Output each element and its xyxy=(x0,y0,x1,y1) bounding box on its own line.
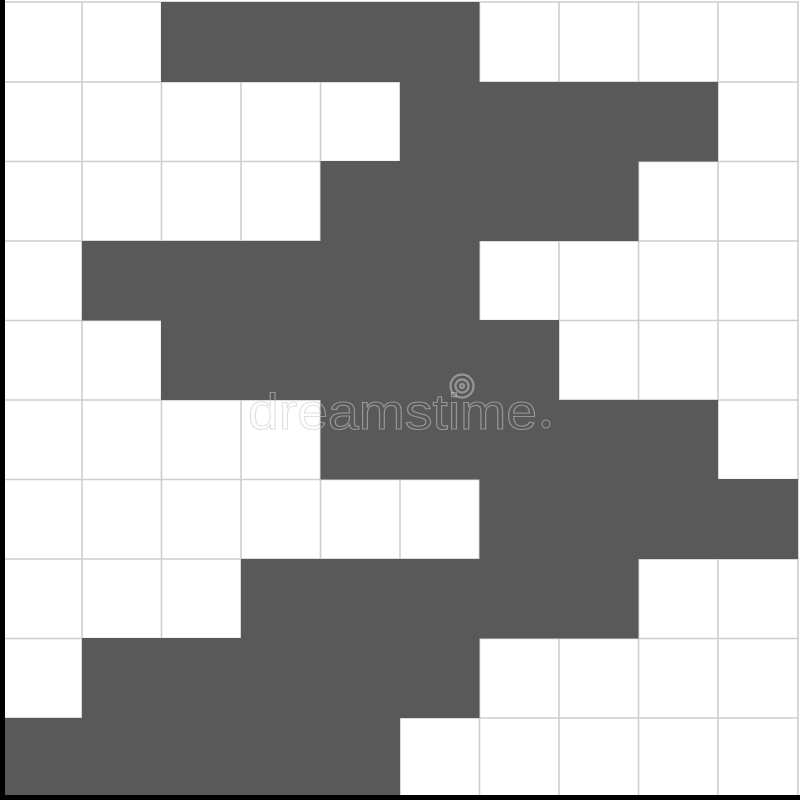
bar: row 8 xyxy=(241,559,638,638)
bar: row 2 xyxy=(400,82,718,162)
y axis xyxy=(0,0,5,800)
icon: watermark spiral xyxy=(450,374,474,398)
bar: row 7 xyxy=(480,479,798,559)
bar: row 1 xyxy=(161,2,480,82)
watermark xyxy=(248,374,550,440)
bar: row 10 xyxy=(5,718,400,796)
bar: row 6 xyxy=(320,400,718,480)
x axis xyxy=(0,795,800,800)
watermark text: dreamstime xyxy=(248,384,537,440)
bar: row 3 xyxy=(320,161,638,241)
bar: row 4 xyxy=(82,241,480,320)
bar: row 9 xyxy=(82,638,480,718)
bar: row 5 xyxy=(161,320,559,400)
icon: watermark registered mark xyxy=(542,420,550,428)
